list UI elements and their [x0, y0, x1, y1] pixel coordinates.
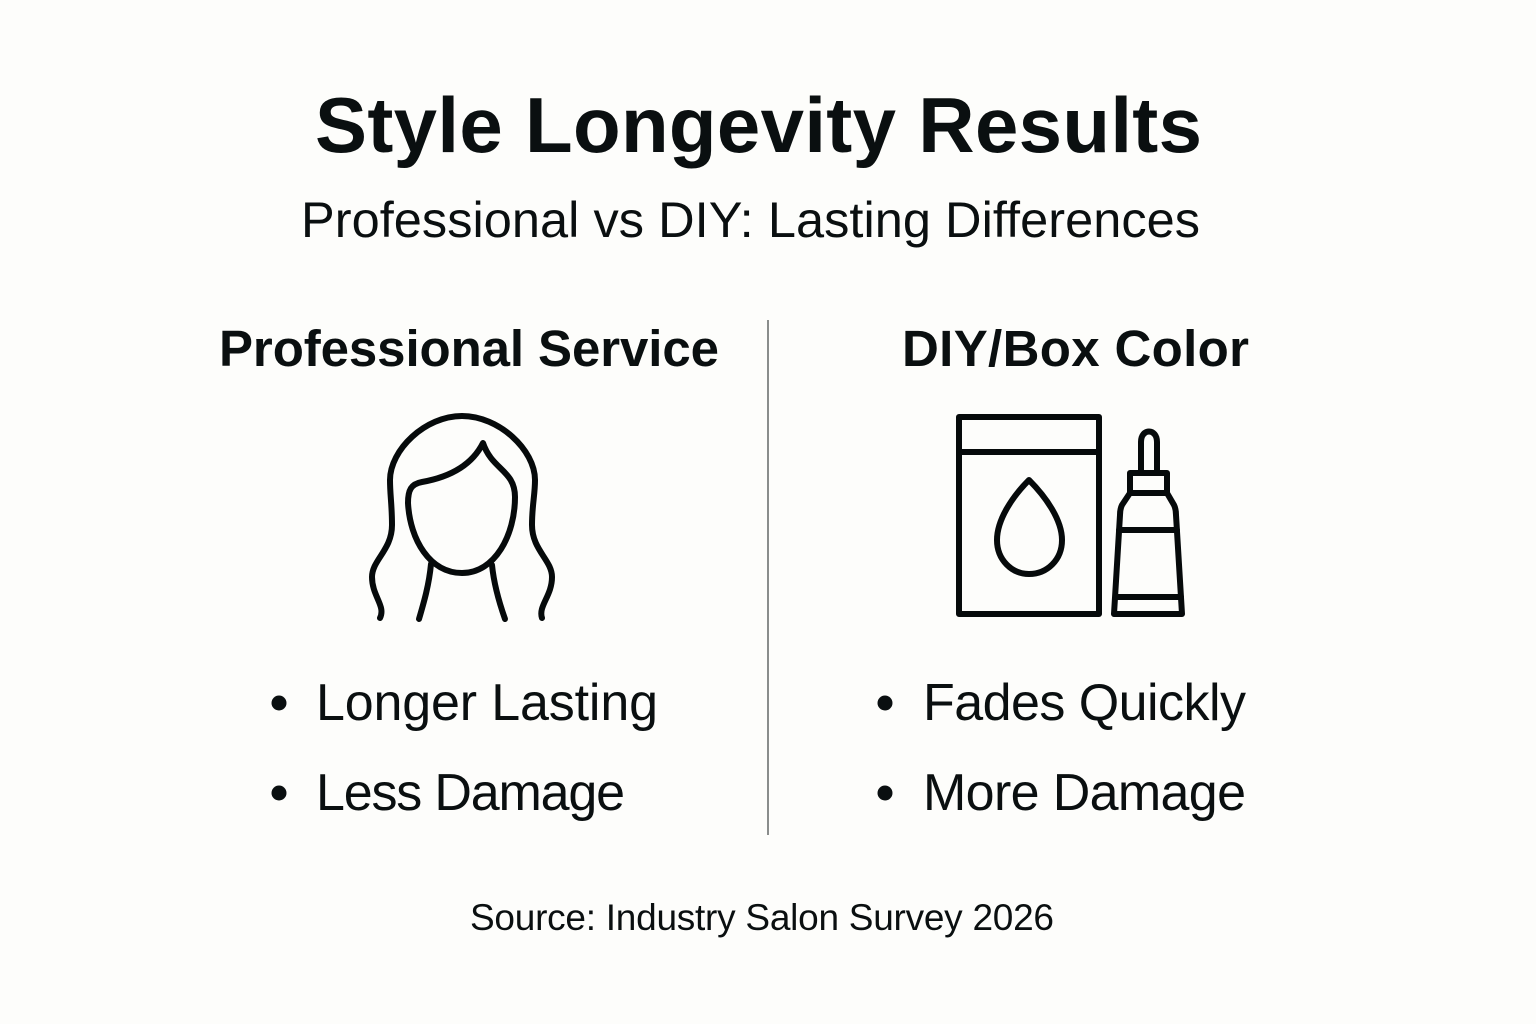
text: fades quickly: Fades Quickly: [923, 674, 1246, 732]
source note: Source: Industry Salon Survey 2026: [470, 897, 1054, 938]
icon: color box and tube: [959, 417, 1182, 614]
text: longer lasting: Longer Lasting: [316, 674, 658, 732]
panel: professional service: [219, 320, 719, 822]
benefit list: professional: [272, 674, 658, 822]
icon: color box with drop: [959, 417, 1099, 614]
bullet: more damage: [878, 786, 892, 800]
bullet: less damage: [272, 786, 286, 800]
drawback list: diy: [878, 674, 1246, 822]
bullet: fades quickly: [878, 696, 892, 710]
heading: professional service: Professional Service: [219, 320, 719, 377]
title: Style Longevity Results: [315, 81, 1202, 169]
heading: diy box color: DIY/Box Color: [902, 320, 1249, 377]
text: more damage: More Damage: [923, 764, 1246, 822]
subtitle: Professional vs DIY: Lasting Differences: [301, 191, 1200, 248]
panel: diy box color: [878, 320, 1249, 822]
icon: applicator tube: [1114, 432, 1182, 614]
bullet: longer lasting: [272, 696, 286, 710]
icon: woman with long hair: [372, 416, 552, 619]
text: less damage: Less Damage: [316, 764, 625, 822]
